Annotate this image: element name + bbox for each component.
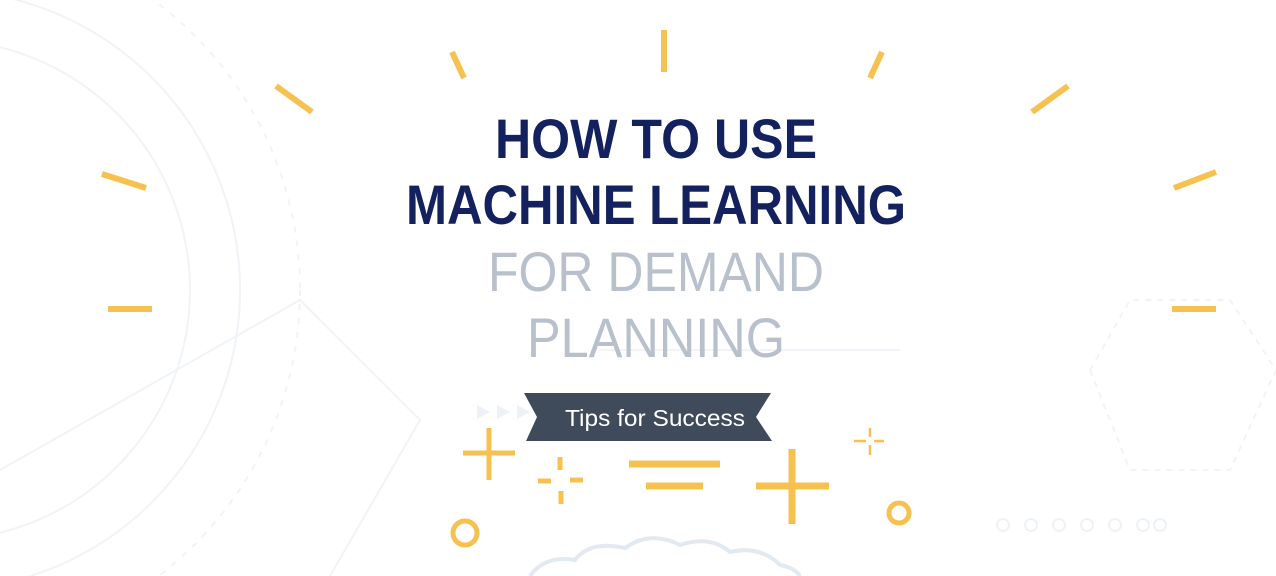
ribbon arrows [477, 405, 530, 419]
title: MACHINE LEARNING [406, 173, 906, 236]
title: FOR DEMAND [488, 240, 824, 303]
title: PLANNING [527, 306, 785, 369]
title: HOW TO USE [495, 107, 817, 170]
sunburst rays [102, 30, 1216, 309]
background small circles [997, 519, 1166, 531]
banner: Tips for Success: Tips for Success [565, 405, 745, 431]
bottom decorations: plus, equals, circles [453, 428, 909, 545]
banner: Tips for Success [524, 393, 772, 441]
cloud outline [530, 538, 800, 576]
title [406, 107, 906, 369]
